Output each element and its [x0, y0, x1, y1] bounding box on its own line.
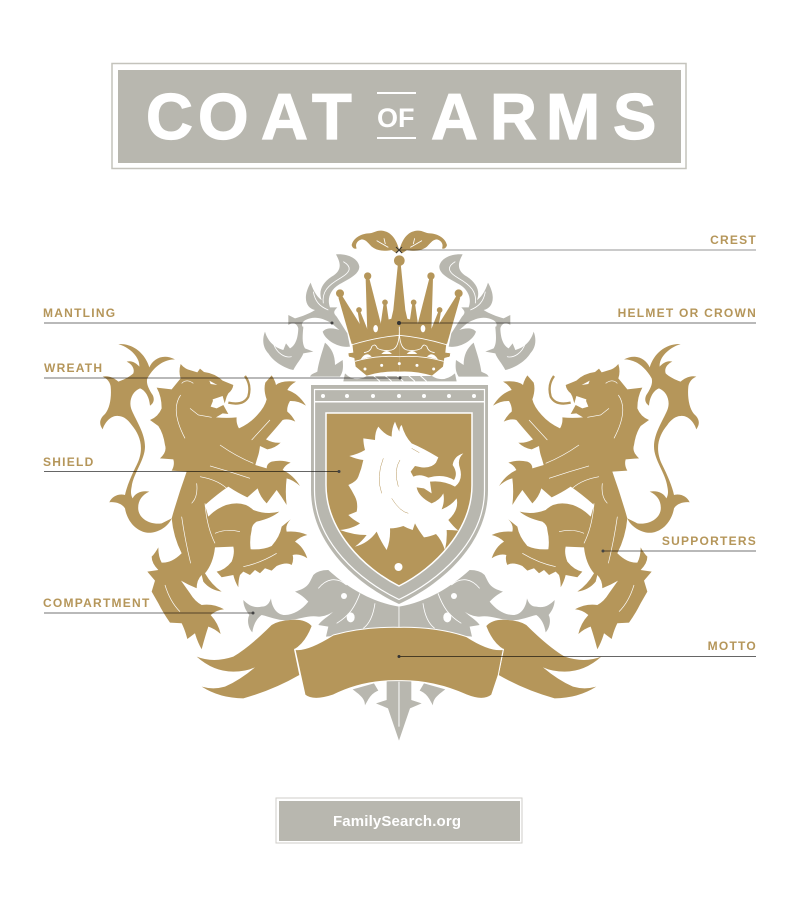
- mantling: upper foliage: [263, 254, 535, 377]
- callout: helmet or crown: HELMET OR CROWN: [618, 306, 757, 320]
- callout: wreath: [44, 361, 402, 380]
- motto right tail: [486, 620, 601, 698]
- ornament below motto: [353, 681, 445, 741]
- callout: helmet or crown: [397, 306, 757, 325]
- title word: OF: [377, 92, 416, 139]
- footer badge: FamilySearch.org: [333, 813, 461, 830]
- footer badge: [276, 798, 522, 843]
- callout: motto: MOTTO: [708, 639, 757, 653]
- title word: OF: OF: [377, 103, 414, 133]
- left lion tail: [100, 344, 175, 533]
- motto scroll: [197, 620, 601, 698]
- callout: wreath: WREATH: [44, 361, 103, 375]
- callout: crest: [396, 233, 757, 253]
- callout: motto: [398, 639, 757, 658]
- left lion body: [147, 364, 307, 649]
- supporter: right lion: [492, 344, 699, 649]
- motto main band: [295, 627, 503, 698]
- crest: [352, 231, 447, 253]
- lion head charge: [340, 422, 463, 550]
- supporter: left lion: [100, 344, 307, 649]
- title word: ARMS: ARMS: [431, 80, 656, 153]
- title word: COAT: COAT: [146, 80, 352, 153]
- title banner: [112, 64, 686, 168]
- callout: mantling: MANTLING: [43, 306, 116, 320]
- motto left tail: [197, 620, 312, 698]
- shield gold field: [326, 413, 472, 586]
- callout: crest: CREST: [710, 233, 757, 247]
- wreath: [343, 373, 457, 381]
- callout: supporters: [602, 534, 757, 552]
- callout: mantling: [43, 306, 334, 324]
- shield: [311, 385, 488, 604]
- callout: compartment: COMPARTMENT: [43, 596, 151, 610]
- callout: supporters: SUPPORTERS: [662, 534, 757, 548]
- compartment: lower foliage: [243, 570, 555, 637]
- callout: shield: SHIELD: [43, 455, 95, 469]
- shield rivets: [321, 394, 476, 398]
- callout: compartment: [43, 596, 254, 614]
- callout: shield: [43, 455, 340, 473]
- crown: [336, 255, 463, 376]
